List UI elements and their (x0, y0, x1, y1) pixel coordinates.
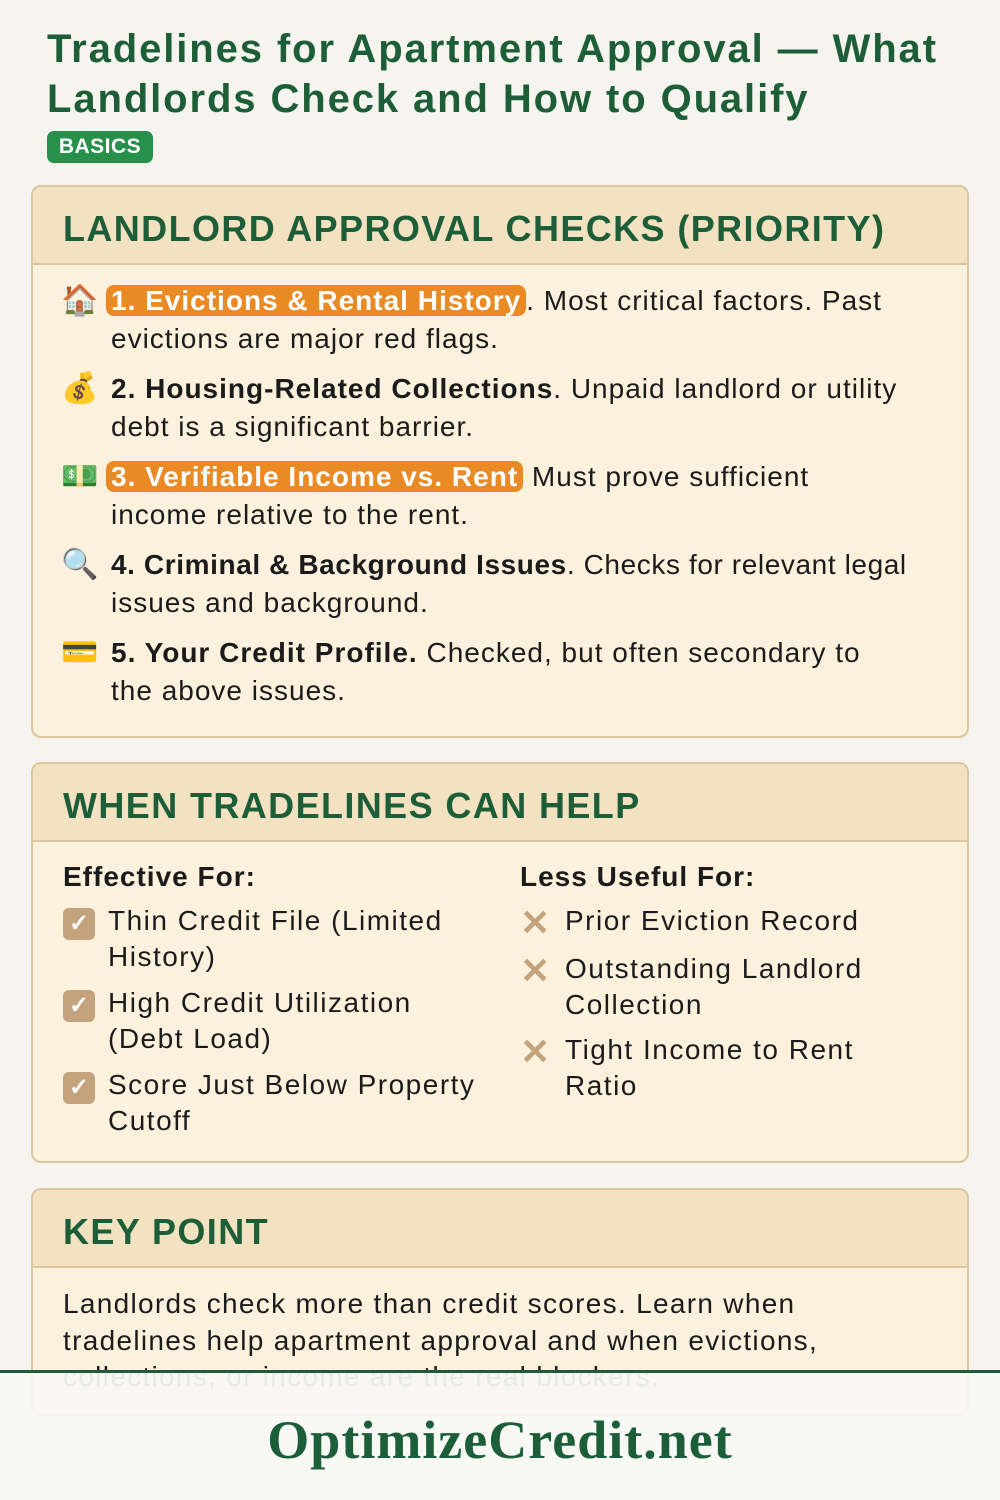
column: effective for: History) (108, 941, 216, 972)
column: less useful for: Ratio (565, 1070, 638, 1101)
heading (33, 1190, 967, 1268)
item 1: 1. Evictions & Rental History. Most critical factors. Past (111, 285, 882, 316)
item 4: issues and background. (111, 587, 429, 618)
panel: landlord approval checks (31, 185, 969, 738)
column: less useful for: Outstanding Landlord (565, 953, 863, 984)
column: effective for: ✓ (69, 992, 89, 1019)
footer brand: OptimizeCredit.net (267, 1410, 733, 1470)
heading: WHEN TRADELINES CAN HELP (63, 785, 641, 826)
column: effective for: Cutoff (108, 1105, 191, 1136)
badge: BASICS (59, 135, 141, 158)
item 3: income relative to the rent. (111, 499, 469, 530)
column: less useful for: Tight Income to Rent (565, 1034, 854, 1065)
title: Tradelines for Apartment Approval — What Landlords Check and How to Qualify (47, 27, 938, 121)
item 2: 💰 (61, 372, 98, 405)
item 5: the above issues. (111, 675, 346, 706)
item 3: 3. Verifiable Income vs. Rent Must prove sufficient (111, 461, 809, 492)
column: less useful for: Prior Eviction Record (565, 905, 859, 936)
column: less useful for: Less Useful For: (520, 861, 755, 892)
item 1 (61, 284, 882, 354)
item 1: 🏠 (61, 284, 98, 317)
key point text: tradelines help apartment approval and when evictions, (63, 1324, 818, 1356)
column: less useful for: ✕ (520, 902, 550, 943)
item 3 (61, 460, 809, 530)
key point text (63, 1288, 818, 1392)
badge (47, 131, 153, 163)
column: effective for: Effective For: (63, 861, 256, 892)
column: effective for: High Credit Utilization (108, 987, 412, 1018)
column: less useful for: Collection (565, 989, 703, 1020)
column: effective for: ✓ (69, 1074, 89, 1101)
heading: LANDLORD APPROVAL CHECKS (PRIORITY) (63, 208, 885, 249)
item 2: 2. Housing-Related Collections. Unpaid landlord or utility (111, 373, 897, 404)
heading (33, 187, 967, 265)
item 5: 5. Your Credit Profile. Checked, but often secondary to (111, 637, 861, 668)
column: effective for (63, 861, 475, 1136)
item 3: 💵 (61, 460, 98, 493)
column: less useful for (520, 861, 863, 1101)
item 2 (61, 371, 897, 442)
item 5: 💳 (61, 636, 98, 669)
item 4 (61, 548, 907, 618)
heading (33, 764, 967, 842)
key point text: collections, or income are the real blockers. (63, 1361, 660, 1392)
key point text: Landlords check more than credit scores. Learn when (63, 1288, 795, 1319)
column: effective for: (Debt Load) (108, 1023, 272, 1054)
column: less useful for: ✕ (520, 950, 550, 991)
item 5 (61, 636, 861, 706)
item 1: evictions are major red flags. (111, 323, 499, 354)
item 2: debt is a significant barrier. (111, 411, 474, 442)
panel: when tradelines can help (31, 762, 969, 1163)
panel: key point (31, 1188, 969, 1416)
column: effective for: Thin Credit File (Limited (108, 905, 443, 936)
item 4: 🔍 (61, 548, 98, 581)
column: effective for: Score Just Below Property (108, 1069, 475, 1100)
column: effective for: ✓ (69, 910, 89, 937)
footer (0, 1370, 1000, 1500)
heading: KEY POINT (63, 1211, 269, 1252)
item 4: 4. Criminal & Background Issues. Checks for relevant legal (111, 549, 907, 580)
column: less useful for: ✕ (520, 1031, 550, 1072)
